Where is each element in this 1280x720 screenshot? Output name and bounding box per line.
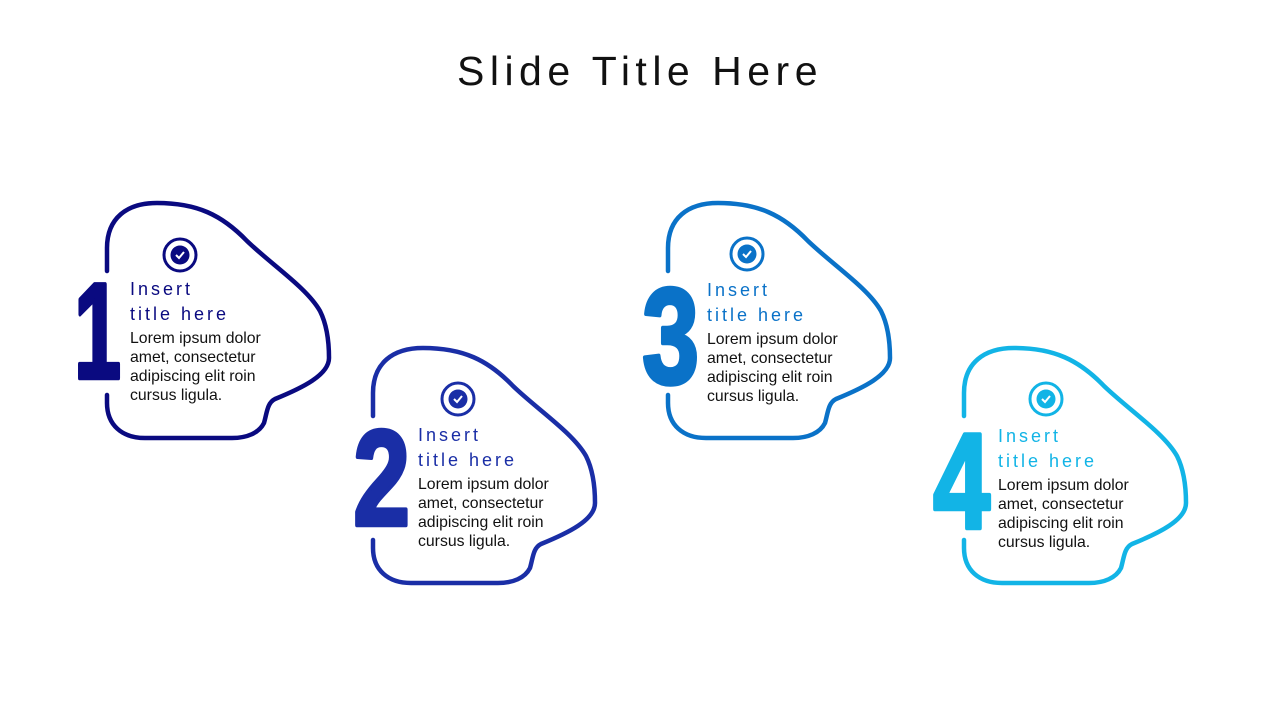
icon: check 4 <box>1030 383 1062 415</box>
text 1: amet, consectetur <box>130 349 256 366</box>
icon: check 3 <box>731 238 763 270</box>
text 4 <box>998 426 1129 551</box>
text 4: cursus ligula. <box>998 534 1090 551</box>
text 4: adipiscing elit roin <box>998 515 1124 532</box>
number 2: 2 <box>353 403 410 554</box>
text 3: Lorem ipsum dolor <box>707 331 838 348</box>
panel: step 4 <box>933 348 1186 583</box>
number 3: 3 <box>642 261 699 412</box>
text 1 <box>130 279 261 404</box>
text 3: cursus ligula. <box>707 388 799 405</box>
text 1: cursus ligula. <box>130 387 222 404</box>
text 2: Insert <box>418 425 481 445</box>
icon: check 1 <box>164 239 196 271</box>
text 1: Insert <box>130 279 193 299</box>
icon: check 2 <box>442 383 474 415</box>
text 3: adipiscing elit roin <box>707 369 833 386</box>
text 2 <box>418 425 549 550</box>
text 3: Insert <box>707 280 770 300</box>
text 4: title here <box>998 451 1097 471</box>
text 2: title here <box>418 450 517 470</box>
number 1: 1 <box>74 255 121 407</box>
text 2: Lorem ipsum dolor <box>418 476 549 493</box>
text 2: amet, consectetur <box>418 495 544 512</box>
text 3 <box>707 280 838 405</box>
text 1: title here <box>130 304 229 324</box>
panel: step 2 <box>353 348 595 583</box>
text 4: Insert <box>998 426 1061 446</box>
text 4: amet, consectetur <box>998 496 1124 513</box>
number 4: 4 <box>933 406 990 557</box>
title: Slide Title Here <box>457 48 823 94</box>
text 3: amet, consectetur <box>707 350 833 367</box>
panel: step 3 <box>642 203 890 438</box>
text 1: Lorem ipsum dolor <box>130 330 261 347</box>
text 1: adipiscing elit roin <box>130 368 256 385</box>
text 2: cursus ligula. <box>418 533 510 550</box>
text 3: title here <box>707 305 806 325</box>
text 2: adipiscing elit roin <box>418 514 544 531</box>
text 4: Lorem ipsum dolor <box>998 477 1129 494</box>
panel: step 1 <box>74 203 329 438</box>
